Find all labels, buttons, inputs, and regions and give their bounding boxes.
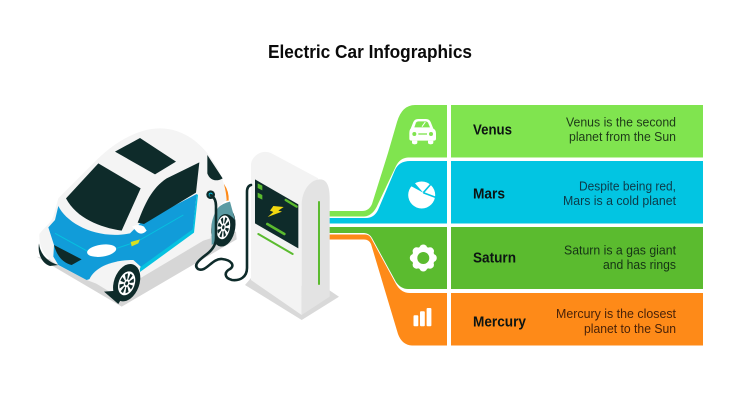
car cyan trim bbox=[140, 194, 198, 272]
car bbox=[37, 128, 238, 307]
description: Saturn: and has rings bbox=[603, 258, 676, 272]
panel: Mars tab bbox=[329, 161, 447, 224]
screen buttons bbox=[258, 183, 262, 200]
car side window bbox=[138, 162, 199, 224]
icon: lightning bolt bbox=[268, 206, 284, 217]
car sunroof bbox=[115, 138, 176, 174]
icon: bar chart bbox=[414, 308, 431, 326]
screen bar top bbox=[286, 200, 297, 207]
screen bar bottom bbox=[267, 224, 284, 234]
car windshield bbox=[66, 163, 141, 231]
panel: Venus row bbox=[451, 105, 703, 158]
car grille bbox=[54, 245, 82, 265]
label: Mercury: Mercury bbox=[473, 315, 526, 331]
car blue panel bbox=[48, 194, 197, 280]
description: Mercury: Mercury is the closest bbox=[556, 307, 677, 321]
station side light bbox=[318, 201, 320, 285]
car front wheel bbox=[104, 260, 145, 305]
charging station bbox=[245, 152, 339, 320]
station shadow bbox=[245, 278, 339, 320]
panel: stems and colored tabs bbox=[329, 105, 447, 346]
description: Mercury: planet to the Sun bbox=[584, 322, 676, 336]
station side face bbox=[302, 179, 330, 315]
panel: Mars row bbox=[451, 161, 703, 224]
car headlight bbox=[86, 243, 117, 259]
station front face bbox=[251, 152, 318, 315]
panel: Mercury tab bbox=[329, 234, 447, 346]
label: Mars: Mars bbox=[473, 187, 505, 203]
car bumper dark bbox=[39, 243, 58, 266]
charge port bbox=[206, 190, 215, 199]
panel: Mercury row bbox=[451, 293, 703, 346]
panel: Saturn row bbox=[451, 227, 703, 289]
car body bbox=[39, 128, 227, 290]
car door line bbox=[55, 215, 183, 252]
description: Venus: planet from the Sun bbox=[569, 130, 676, 144]
car mirror bbox=[132, 225, 147, 234]
label: Venus: Venus bbox=[473, 123, 512, 139]
description: Mars: Despite being red, bbox=[579, 180, 676, 194]
icon: flower gear bbox=[410, 244, 437, 272]
panel: Saturn tab bbox=[329, 227, 447, 289]
car front fender bbox=[89, 260, 141, 295]
title: Electric Car Infographics bbox=[268, 41, 472, 62]
station screen bbox=[255, 179, 298, 248]
car rear wheel bbox=[209, 202, 238, 248]
icon: pie chart bbox=[408, 181, 436, 208]
charging cable bbox=[196, 185, 251, 280]
label: Saturn: Saturn bbox=[473, 251, 516, 267]
car rear window bbox=[207, 155, 223, 180]
description: Mars: Mars is a cold planet bbox=[563, 194, 677, 208]
description: Saturn: Saturn is a gas giant bbox=[564, 243, 677, 257]
icon: car bbox=[409, 119, 436, 144]
car shadow bbox=[37, 232, 237, 307]
car tail light bbox=[224, 184, 229, 201]
panel: Venus tab bbox=[329, 105, 447, 216]
car indicator bbox=[131, 239, 140, 246]
description: Venus: Venus is the second bbox=[566, 116, 676, 130]
station body bbox=[251, 152, 330, 315]
station lower bar bbox=[258, 234, 293, 254]
